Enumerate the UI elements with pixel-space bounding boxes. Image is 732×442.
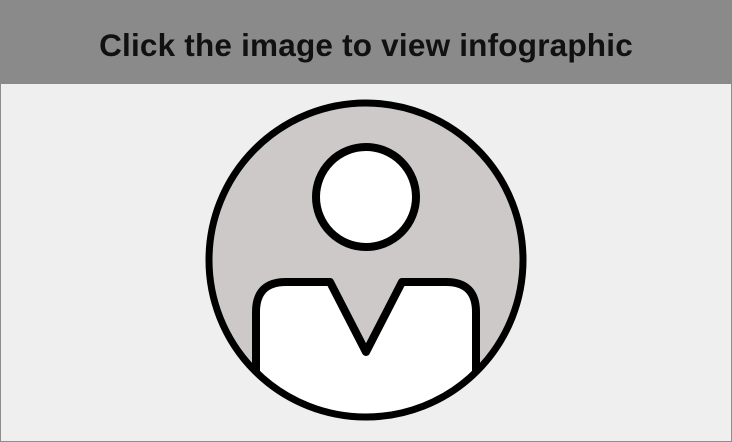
title: Click the image to view infographic	[99, 26, 633, 62]
icon: body	[252, 278, 480, 414]
header bar	[0, 0, 732, 84]
icon: person placeholder	[206, 100, 526, 420]
icon: head	[316, 147, 416, 247]
